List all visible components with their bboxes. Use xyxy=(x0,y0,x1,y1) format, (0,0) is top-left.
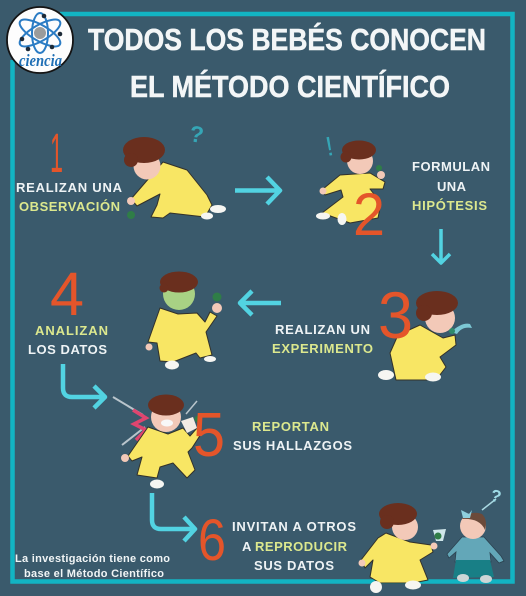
step 5: label xyxy=(233,419,352,453)
step 2: label xyxy=(412,159,490,213)
step 2: label: FORMULAN xyxy=(412,159,490,174)
step 6: label xyxy=(232,519,356,573)
step 6: label: INVITAN A OTROS xyxy=(232,519,356,534)
step 2: label: HIPÓTESIS xyxy=(412,198,487,213)
arrow: step 5 to 6 xyxy=(152,493,195,541)
arrow: step 2 to 3 xyxy=(432,229,450,263)
title: EL MÉTODO CIENTÍFICO xyxy=(130,69,450,104)
step 6: label: A xyxy=(242,539,252,554)
title xyxy=(88,22,486,104)
step 3: label: REALIZAN UN xyxy=(275,322,370,337)
footer note: La investigación tiene como xyxy=(15,553,170,565)
logo: ciencia atom badge xyxy=(7,7,73,73)
step 5: number: 5 xyxy=(193,401,225,470)
footer note: base el Método Científico xyxy=(24,568,164,580)
logo: ciencia atom badge: ciencia xyxy=(19,51,62,70)
step 6: number: 6 xyxy=(198,508,226,573)
step 5: label: SUS HALLAZGOS xyxy=(233,438,352,453)
step 3: number: 3 xyxy=(378,278,413,352)
baby 4: sick green face xyxy=(146,272,222,370)
step 4: number: 4 xyxy=(50,260,84,328)
step 3: label: EXPERIMENTO xyxy=(272,341,373,356)
step 1: label: OBSERVACIÓN xyxy=(19,199,120,214)
step 1: label xyxy=(16,180,123,214)
step 1: label: REALIZAN UNA xyxy=(16,180,123,195)
baby 6: blue baby with question: ? xyxy=(488,486,503,507)
baby 6: yellow baby offering sample xyxy=(358,503,446,593)
baby 3: tasting xyxy=(378,291,472,382)
step 6: label: SUS DATOS xyxy=(254,558,334,573)
step 3: label xyxy=(272,322,373,356)
baby 6: blue baby with question xyxy=(447,486,504,583)
arrow: step 1 to 2 xyxy=(235,177,280,204)
step 4: label: ANALIZAN xyxy=(35,323,108,338)
arrow: step 4 to 5 xyxy=(63,364,105,408)
arrow: step 3 to 4 xyxy=(240,291,281,315)
baby 1: crawling xyxy=(123,137,226,220)
step 5: label: REPORTAN xyxy=(252,419,329,434)
step 4: label: LOS DATOS xyxy=(28,342,107,357)
infographic canvas: 1 xyxy=(50,121,63,184)
step 2: label: UNA xyxy=(437,179,467,194)
baby 5: shouting with sample xyxy=(113,394,202,488)
step 6: label: REPRODUCIR xyxy=(255,539,348,554)
step 2: number: 2 xyxy=(353,181,385,248)
baby 2: sitting xyxy=(316,140,385,225)
icon: question mark: ? xyxy=(188,120,206,148)
icon: exclamation mark: ! xyxy=(323,131,336,162)
footer note xyxy=(15,553,170,580)
step 4: label xyxy=(28,323,108,357)
